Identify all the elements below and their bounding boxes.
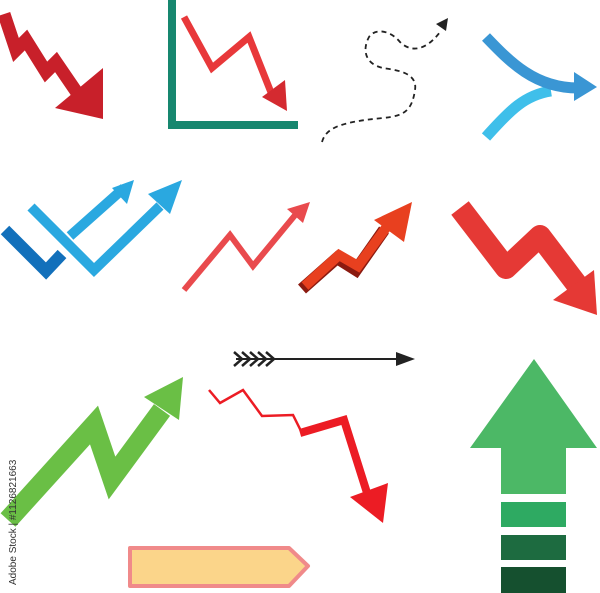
- arrow: red thin falling zigzag: [209, 390, 388, 523]
- arrow: big green up arrow with bars: [470, 359, 597, 593]
- arrows: blue double check arrows: [5, 180, 182, 271]
- arrow: black feathered arrow: [234, 352, 415, 366]
- arrow: blue merging arrows: [486, 37, 597, 137]
- watermark text: Adobe Stock | #1126821663: [8, 459, 19, 585]
- arrow: 3D red rising: [302, 202, 412, 289]
- arrow: dark red zigzag down: [4, 14, 103, 119]
- chart: teal axes with red falling line: [172, 0, 298, 125]
- arrow: pink-red rising zigzag: [184, 202, 310, 290]
- arrow: dashed winding path: [322, 18, 448, 142]
- tag: yellow pointed label: [130, 548, 308, 586]
- arrow: big red falling zigzag: [460, 208, 597, 315]
- arrow: green rising zigzag: [8, 377, 183, 520]
